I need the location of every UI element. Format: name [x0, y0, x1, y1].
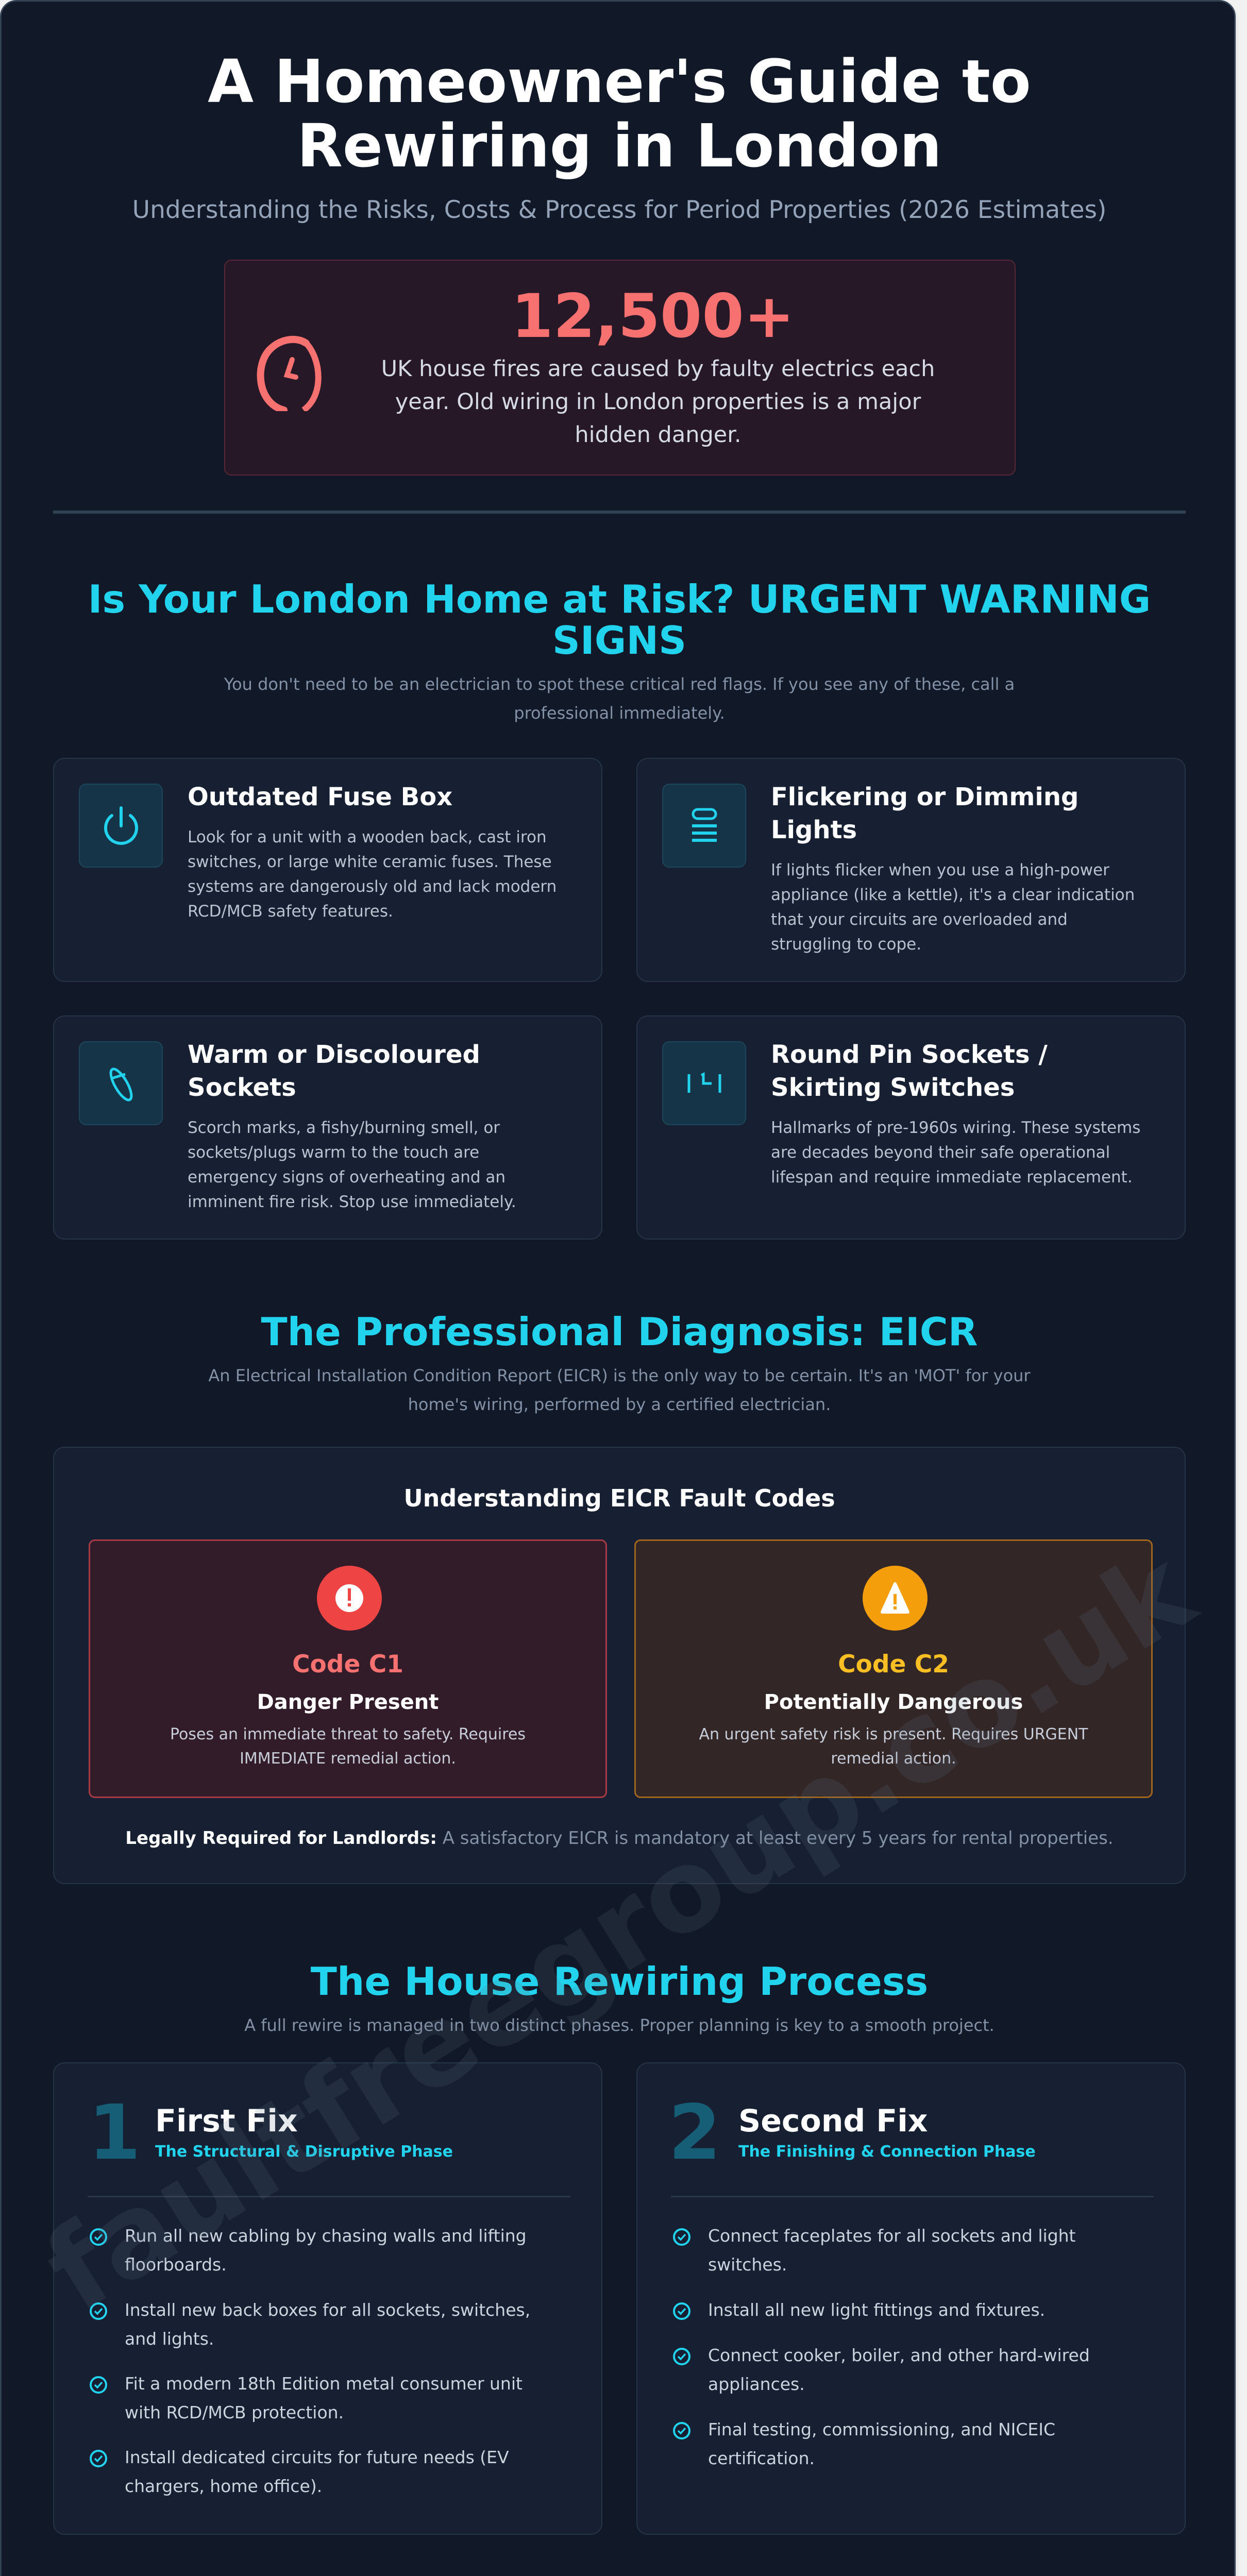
icon: clock: [257, 336, 322, 411]
code C2: Code C2: [838, 1650, 949, 1679]
code C1: Poses an immediate threat to safety. Requires IMMEDIATE remedial action.: [170, 1725, 526, 1768]
heading: warning signs: Is Your London Home at Risk? URGENT WARNING SIGNS: [88, 577, 1151, 663]
checklist: first fix: Fit a modern 18th Edition metal consumer unit with RCD/MCB protection.: [125, 2374, 523, 2422]
checklist: second fix: [673, 2226, 1090, 2468]
code C2: [634, 1539, 1153, 1798]
watermark: faultfreegroup.co.uk: [23, 1524, 1215, 2337]
panel: warm sockets: Warm or Discoloured Sockets: [188, 1040, 480, 1102]
icon: alert: [317, 1566, 382, 1631]
icon: plug: [79, 1041, 163, 1125]
title: [208, 47, 1031, 181]
panel: round pin sockets: Round Pin Sockets / Skirting Switches: [771, 1040, 1048, 1102]
icon: warning: [863, 1566, 928, 1631]
code C1: [89, 1539, 607, 1798]
title: A Homeowner's Guide to: [208, 47, 1031, 116]
panel: first fix: 1: [88, 2089, 141, 2177]
landlord note: Legally Required for Landlords: A satisfactory EICR is mandatory at least every 5 years for rental properties.: [125, 1828, 1114, 1849]
panel: round pin sockets: [636, 1015, 1186, 1240]
panel: round pin sockets: Hallmarks of pre-1960s wiring. These systems are decades beyond their safe operational lifespan and require immediate replacement.: [771, 1118, 1140, 1187]
checklist: first fix: Install dedicated circuits for future needs (EV chargers, home office).: [125, 2447, 509, 2496]
panel: flickering lights: [636, 758, 1186, 982]
panel: second fix: The Finishing & Connection Phase: [738, 2143, 1036, 2161]
warning intro: You don't need to be an electrician to spot these critical red flags. If you see any of these, call a professional immediately.: [224, 674, 1015, 723]
checklist: second fix: Final testing, commissioning, and NICEIC certification.: [708, 2419, 1055, 2468]
code C1: Code C1: [292, 1650, 403, 1679]
subtitle: Understanding the Risks, Costs & Process for Period Properties (2026 Estimates): [132, 196, 1106, 224]
stat text: UK house fires are caused by faulty electrics each year. Old wiring in London properties is a major hidden danger.: [381, 356, 935, 448]
stat callout: [224, 260, 1016, 476]
panel: flickering lights: Flickering or Dimming Lights: [771, 783, 1079, 844]
panel: second fix: 2: [668, 2089, 721, 2177]
checklist: second fix: Connect faceplates for all sockets and light switches.: [708, 2226, 1076, 2275]
code C1: Danger Present: [257, 1690, 439, 1714]
panel: first fix: [53, 2062, 602, 2535]
checklist: first fix: [90, 2226, 530, 2496]
code C2: Potentially Dangerous: [764, 1690, 1023, 1714]
code C2: An urgent safety risk is present. Requires URGENT remedial action.: [699, 1725, 1088, 1768]
icon: power: [79, 784, 163, 868]
checklist: second fix: Install all new light fittings and fixtures.: [708, 2300, 1045, 2320]
stat number: 12,500+: [511, 281, 795, 351]
EICR intro: An Electrical Installation Condition Report (EICR) is the only way to be certain. It's an 'MOT' for your home's wiring, performed by a certified electrician.: [208, 1366, 1031, 1414]
panel: outdated fuse box: Look for a unit with a wooden back, cast iron switches, or large white ceramic fuses. These systems are dangerously old and lack modern RCD/MCB safety features.: [188, 828, 557, 921]
checklist: first fix: Install new back boxes for all sockets, switches, and lights.: [125, 2300, 530, 2349]
panel: flickering lights: If lights flicker when you use a high-power appliance (like a kettle), it's a clear indication that your circuits are overloaded and struggling to cope.: [771, 861, 1135, 954]
icon: socket: [662, 1041, 746, 1125]
panel: warm sockets: [53, 1015, 602, 1240]
panel: EICR fault codes: [53, 1447, 1186, 1884]
checklist: first fix: Run all new cabling by chasing walls and lifting floorboards.: [125, 2226, 527, 2275]
panel: outdated fuse box: [53, 758, 602, 982]
checklist: second fix: Connect cooker, boiler, and other hard-wired appliances.: [708, 2345, 1090, 2394]
panel: second fix: Second Fix: [738, 2103, 928, 2139]
title: Rewiring in London: [297, 112, 942, 181]
icon: lines: [662, 784, 746, 868]
process intro: A full rewire is managed in two distinct phases. Proper planning is key to a smooth project.: [244, 2015, 995, 2035]
panel: warm sockets: Scorch marks, a fishy/burning smell, or sockets/plugs warm to the touch are emergency signs of overheating and an imminent fire risk. Stop use immediately.: [188, 1118, 516, 1211]
panel: second fix: [636, 2062, 1186, 2535]
panel: first fix: First Fix: [155, 2103, 298, 2139]
panel heading: Understanding EICR Fault Codes: [403, 1484, 835, 1512]
panel: first fix: The Structural & Disruptive Phase: [155, 2143, 453, 2161]
panel: outdated fuse box: Outdated Fuse Box: [188, 783, 452, 811]
heading: EICR: The Professional Diagnosis: EICR: [261, 1309, 978, 1354]
heading: process: The House Rewiring Process: [311, 1959, 928, 2004]
